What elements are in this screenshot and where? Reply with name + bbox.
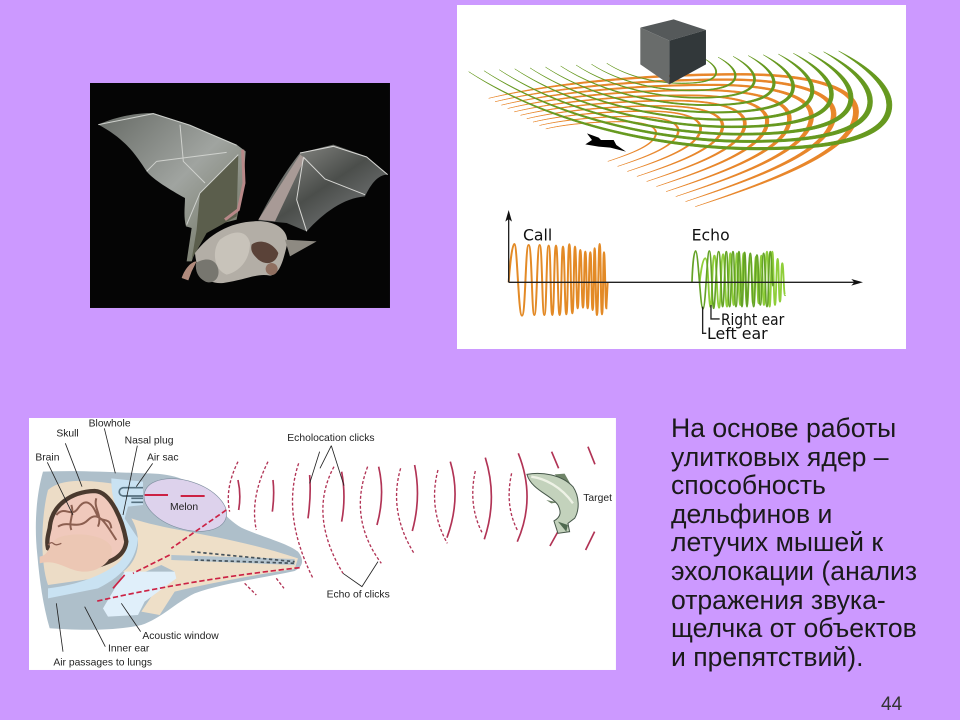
nasal passages	[119, 488, 143, 502]
call and echo chart	[505, 210, 863, 343]
dolphin labels: Echolocation clicks	[287, 433, 375, 444]
label: right ear: Right ear	[721, 310, 785, 329]
dolphin labels: Acoustic window	[142, 631, 219, 642]
dolphin labels: Echo of clicks	[327, 590, 390, 601]
brain	[47, 491, 126, 568]
panel: echolocation wave diagram	[457, 5, 906, 349]
label: call: Call	[523, 225, 552, 244]
label: left ear: Left ear	[707, 324, 768, 343]
melon	[137, 469, 233, 541]
label: melon: Melon	[170, 502, 198, 513]
bat left wing	[98, 113, 246, 261]
echo of clicks	[228, 462, 517, 595]
text block: caption: На основе работы	[671, 413, 896, 443]
label: left ear	[703, 307, 768, 343]
text block: caption: летучих мышей к	[671, 527, 883, 557]
text block: caption: щелчка от объектов	[671, 613, 917, 643]
dolphin labels: Brain	[35, 452, 60, 463]
photo: flying bat	[90, 83, 390, 308]
page number: 44	[881, 694, 902, 715]
dolphin labels: Target	[583, 493, 612, 504]
dolphin labels: Nasal plug	[125, 436, 174, 447]
echo waveform: left ear	[692, 251, 774, 309]
text block: caption: эхолокации (анализ	[671, 556, 917, 586]
orange call wavefronts	[489, 73, 859, 207]
dolphin head	[36, 469, 302, 630]
label: echo: Echo	[692, 225, 730, 244]
call waveform	[509, 244, 608, 316]
icon: grey cube	[640, 19, 706, 84]
echolocation clicks	[238, 447, 595, 550]
bat body and head	[182, 221, 317, 283]
text block: caption: дельфинов и	[671, 499, 832, 529]
bat right wing	[258, 145, 388, 231]
text block: caption: отражения звука-	[671, 585, 886, 615]
dolphin labels: Skull	[56, 429, 79, 440]
teeth	[191, 552, 295, 563]
echo waveform: right ear	[700, 252, 785, 308]
label: right ear	[711, 305, 785, 329]
leader lines	[47, 428, 378, 652]
icon: target fish	[527, 473, 578, 533]
sound path arrows	[95, 495, 300, 602]
dolphin labels: Air passages to lungs	[53, 658, 152, 669]
text block: caption: способность	[671, 470, 826, 500]
icon: bat silhouette	[585, 133, 626, 152]
text block: caption: улитковых ядер –	[671, 442, 889, 472]
dolphin labels	[35, 419, 612, 669]
text block: caption	[671, 413, 917, 672]
text block: caption: и препятствий).	[671, 642, 863, 672]
panel: dolphin echolocation	[29, 418, 616, 670]
dolphin labels: Air sac	[147, 452, 179, 463]
dolphin labels: Blowhole	[89, 419, 131, 430]
dolphin labels: Inner ear	[108, 644, 150, 655]
green echo wavefronts	[469, 51, 892, 150]
chart axes	[509, 214, 859, 282]
